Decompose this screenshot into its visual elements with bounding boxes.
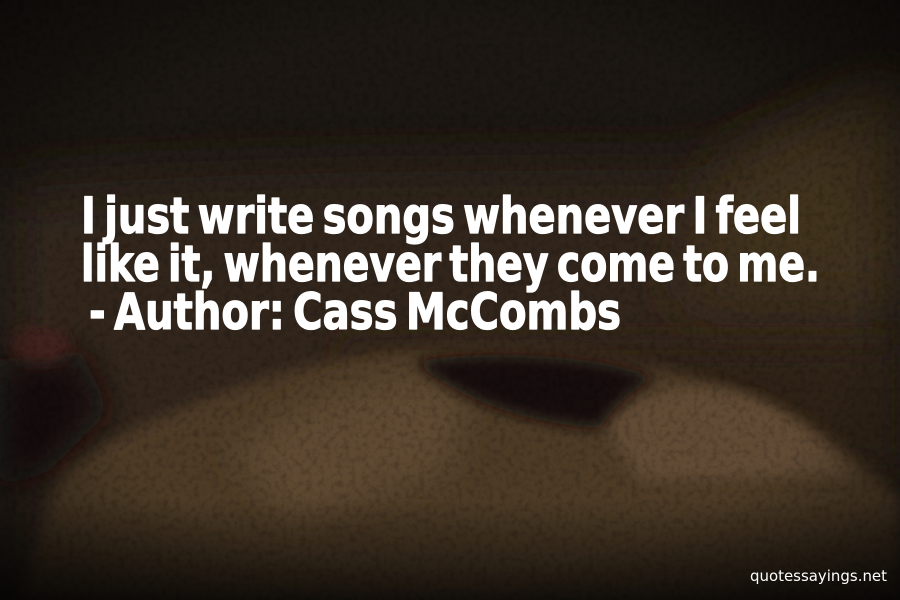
author attribution: - Author: Cass McCombs [89, 283, 621, 341]
quote text [81, 187, 820, 341]
watermark: quotessayings.net [750, 567, 887, 585]
